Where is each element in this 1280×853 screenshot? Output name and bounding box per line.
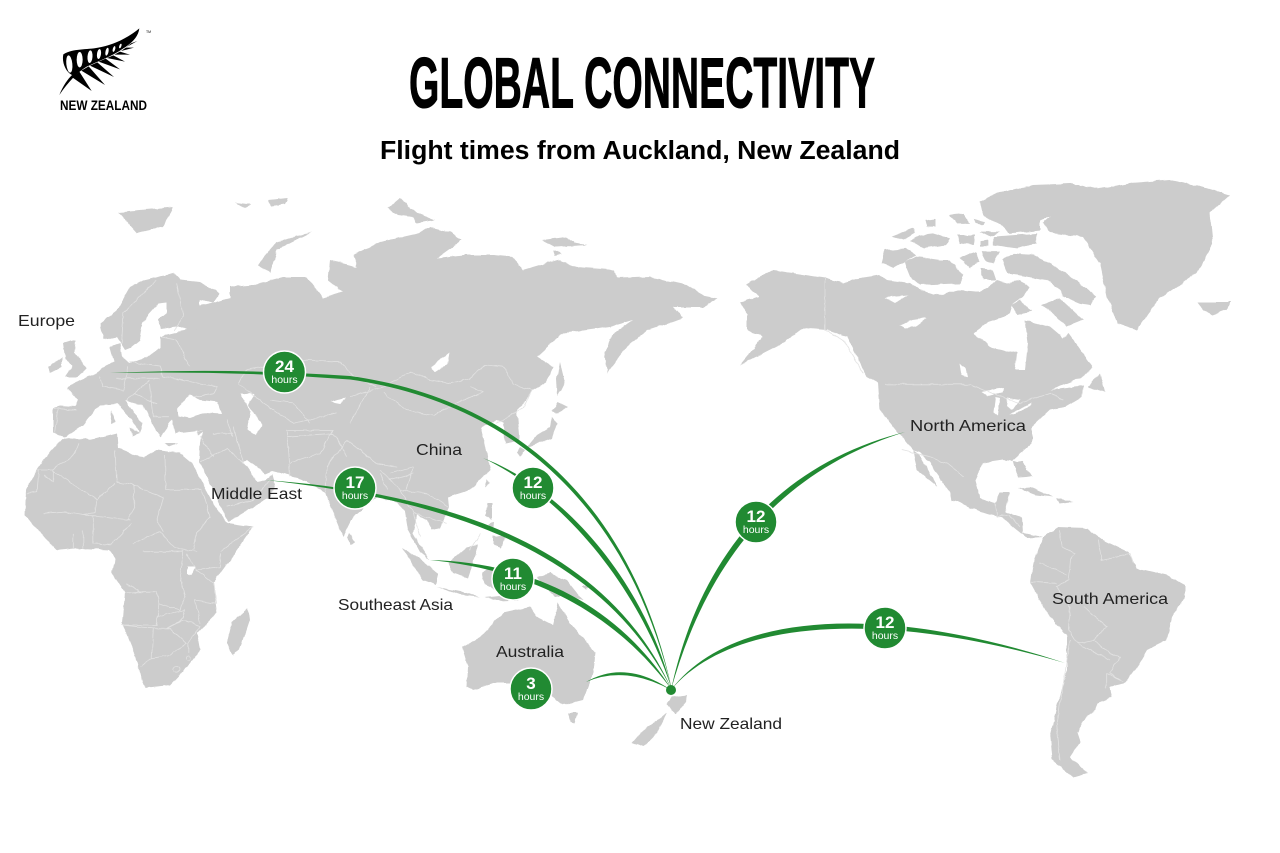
badge: Australia 3 hours: hours bbox=[518, 691, 544, 703]
route: Southeast Asia to New Zealand bbox=[430, 560, 672, 690]
logo: New Zealand silver fern: TM bbox=[146, 30, 151, 34]
title: GLOBAL CONNECTIVITY bbox=[409, 44, 875, 124]
label: Middle East: Middle East bbox=[211, 486, 303, 503]
badge: South America 12 hours: 12 bbox=[876, 613, 894, 632]
badge: Middle East 17 hours: hours bbox=[342, 490, 368, 502]
label: New Zealand: New Zealand bbox=[680, 716, 782, 733]
badge: Middle East 17 hours: 17 bbox=[346, 473, 364, 492]
badge: North America 12 hours bbox=[735, 501, 777, 543]
route: North America to New Zealand bbox=[671, 432, 905, 690]
badge: North America 12 hours: 12 bbox=[747, 507, 765, 526]
label: Australia: Australia bbox=[496, 644, 564, 661]
route: Middle East to New Zealand bbox=[265, 480, 672, 690]
badge: North America 12 hours: hours bbox=[743, 524, 769, 536]
badge: Australia 3 hours bbox=[510, 668, 552, 710]
label: North America: North America bbox=[910, 418, 1026, 435]
badge: Southeast Asia 11 hours bbox=[492, 558, 534, 600]
subtitle: Flight times from Auckland, New Zealand bbox=[380, 137, 900, 165]
badge: South America 12 hours bbox=[864, 607, 906, 649]
badge: South America 12 hours: hours bbox=[872, 630, 898, 642]
badge: Europe 24 hours bbox=[264, 351, 306, 393]
badge: Europe 24 hours: 24 bbox=[275, 357, 294, 376]
world map bbox=[25, 180, 1230, 777]
Auckland hub dot bbox=[666, 685, 676, 695]
badge: China 12 hours: 12 bbox=[524, 473, 542, 492]
route: South America to New Zealand bbox=[671, 623, 1065, 690]
label: South America: South America bbox=[1052, 591, 1168, 608]
label: Europe: Europe bbox=[18, 313, 75, 330]
route: Australia to New Zealand bbox=[586, 672, 671, 690]
badge: Europe 24 hours: hours bbox=[271, 374, 298, 386]
badge: Australia 3 hours: 3 bbox=[526, 674, 536, 693]
label: China: China bbox=[416, 442, 462, 459]
badge: China 12 hours bbox=[512, 467, 554, 509]
badge: Middle East 17 hours bbox=[334, 467, 376, 509]
badge: Southeast Asia 11 hours: 11 bbox=[504, 564, 522, 583]
logo: New Zealand silver fern bbox=[59, 28, 151, 113]
route: China to New Zealand bbox=[483, 458, 672, 690]
logo: New Zealand silver fern: NEW ZEALAND bbox=[60, 98, 147, 113]
badge: China 12 hours: hours bbox=[520, 490, 546, 502]
country borders bbox=[27, 427, 397, 673]
route: Europe to New Zealand bbox=[110, 371, 672, 690]
label: Southeast Asia: Southeast Asia bbox=[338, 597, 453, 614]
badge: Southeast Asia 11 hours: hours bbox=[500, 581, 526, 593]
